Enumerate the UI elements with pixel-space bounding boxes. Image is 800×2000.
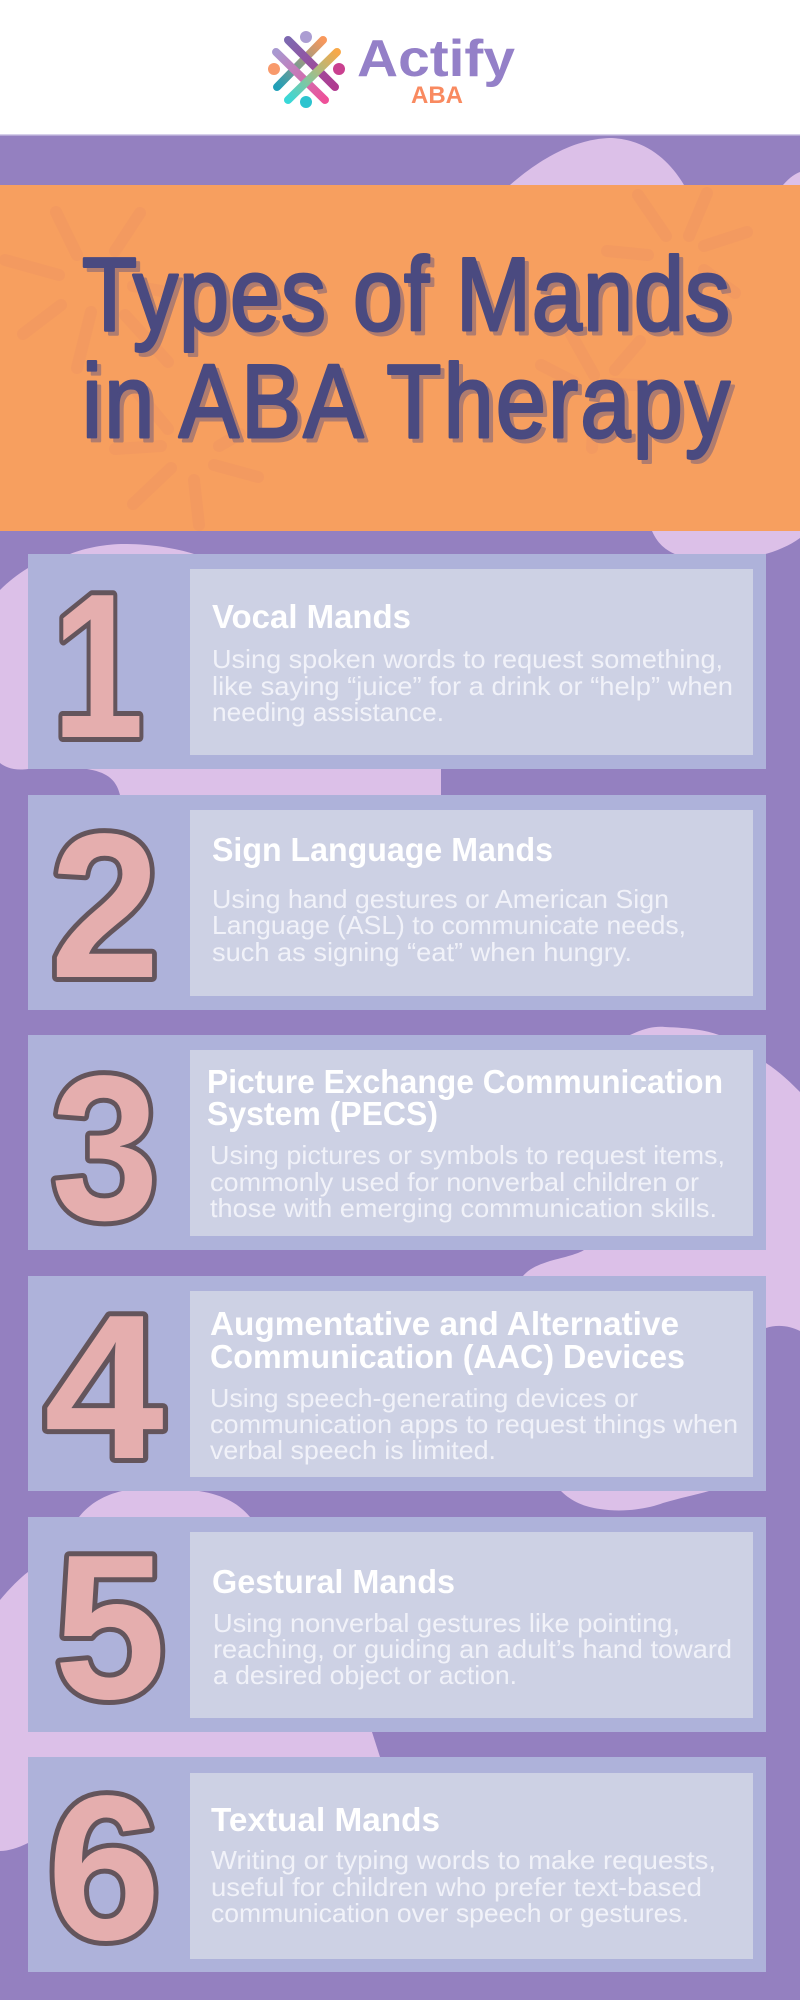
description <box>210 1140 725 1223</box>
panel 2: sign language mands <box>28 791 766 1021</box>
description: Using pictures or symbols to request items, <box>210 1140 725 1170</box>
logo sub-wordmark: ABA <box>411 82 463 109</box>
description: a desired object or action. <box>213 1660 517 1690</box>
description: communication over speech or gestures. <box>211 1898 689 1928</box>
panel 6: textual mands <box>28 1753 766 1983</box>
description <box>212 644 733 727</box>
description: Language (ASL) to communicate needs, <box>212 910 686 940</box>
description <box>210 1383 738 1465</box>
title <box>82 236 730 459</box>
heading: Vocal Mands <box>212 598 411 635</box>
number 4: 4 <box>44 1272 164 1502</box>
title: in ABA Therapy <box>82 343 730 459</box>
heading <box>207 1063 723 1132</box>
number 2: 2 <box>50 791 160 1021</box>
heading: Gestural Mands <box>212 1563 455 1600</box>
panel 5: gestural mands <box>28 1512 766 1742</box>
heading: Textual Mands <box>211 1801 440 1838</box>
panel 1: vocal mands <box>28 551 766 781</box>
title shadow: in ABA Therapy <box>86 347 734 463</box>
description <box>212 884 686 967</box>
number 6: 6 <box>47 1753 161 1983</box>
heading <box>210 1305 685 1375</box>
description: Using speech-generating devices or <box>210 1383 638 1413</box>
description: those with emerging communication skills. <box>210 1193 717 1223</box>
heading: Augmentative and Alternative <box>210 1305 679 1342</box>
sunburst rays <box>5 193 747 525</box>
number 5: 5 <box>54 1512 166 1742</box>
heading: Picture Exchange Communication <box>207 1063 723 1100</box>
description: Using nonverbal gestures like pointing, <box>213 1608 680 1638</box>
description: commonly used for nonverbal children or <box>210 1167 699 1197</box>
description: Using spoken words to request something, <box>212 644 723 674</box>
title shadow: Types of Mands <box>86 240 734 356</box>
number 3: 3 <box>51 1033 159 1263</box>
heading: System (PECS) <box>207 1095 438 1132</box>
icon: woven logo mark <box>268 31 345 108</box>
logo wordmark: Actify <box>357 30 515 88</box>
panel 3: PECS <box>28 1033 766 1263</box>
description: like saying “juice” for a drink or “help” when <box>212 671 733 701</box>
header background <box>0 0 800 134</box>
heading: Communication (AAC) Devices <box>210 1338 685 1375</box>
description: reaching, or guiding an adult’s hand toward <box>213 1634 732 1664</box>
number 1: 1 <box>52 551 144 781</box>
description <box>211 1845 716 1928</box>
description: communication apps to request things when <box>210 1409 738 1439</box>
description: verbal speech is limited. <box>210 1435 496 1465</box>
description: useful for children who prefer text-based <box>211 1872 702 1902</box>
heading: Sign Language Mands <box>212 831 553 868</box>
title shadow <box>86 240 734 463</box>
title banner <box>0 185 800 531</box>
description: Writing or typing words to make requests, <box>211 1845 716 1875</box>
description: needing assistance. <box>212 697 444 727</box>
logo: Actify ABA <box>268 30 515 109</box>
description: Using hand gestures or American Sign <box>212 884 669 914</box>
title: Types of Mands <box>82 236 730 352</box>
panel 4: AAC devices <box>28 1272 766 1502</box>
description <box>213 1608 732 1690</box>
description: such as signing “eat” when hungry. <box>212 937 632 967</box>
